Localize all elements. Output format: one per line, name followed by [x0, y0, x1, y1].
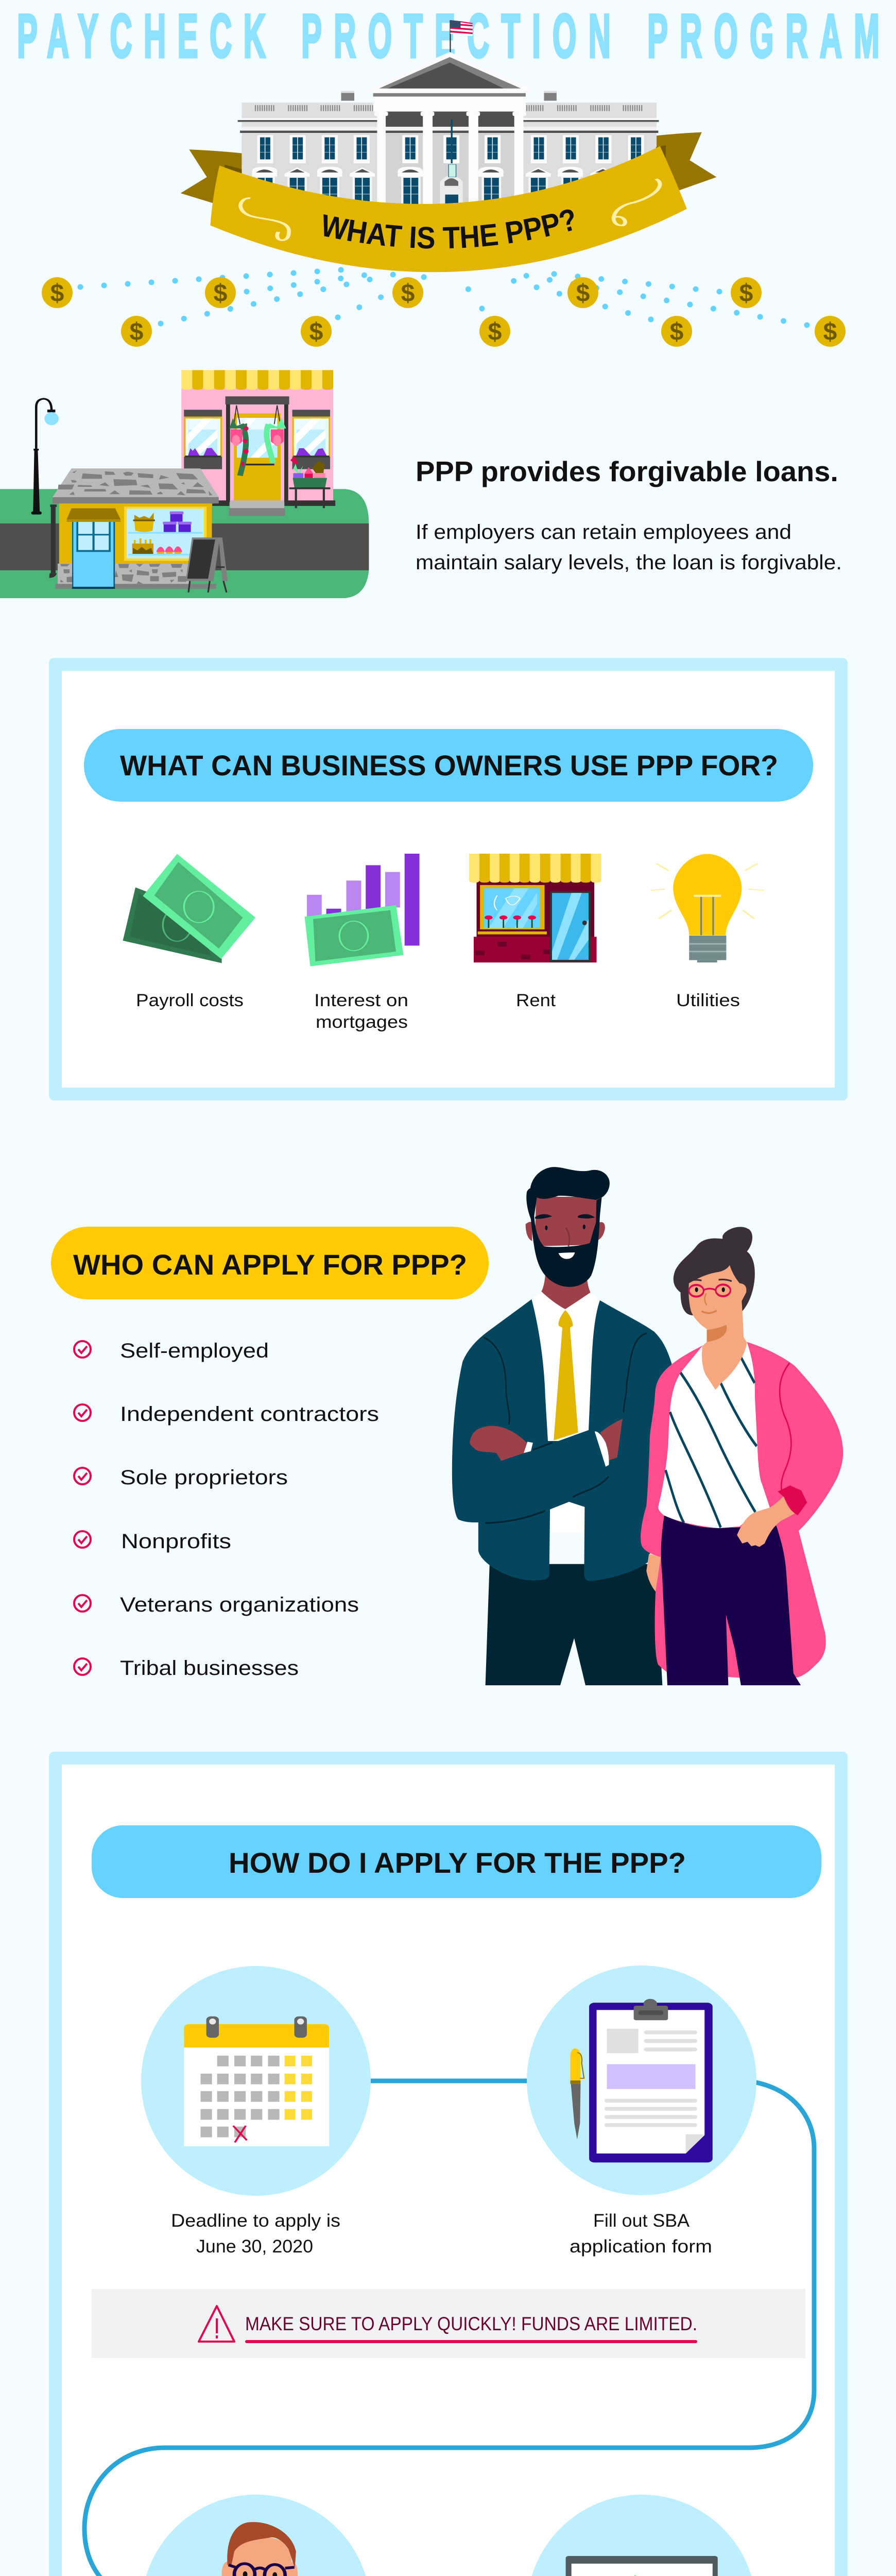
labels: Rent — [516, 991, 556, 1010]
heading pill: WHAT CAN BUSINESS OWNERS USE PPP FOR? — [120, 749, 778, 782]
coins: $ — [214, 280, 228, 307]
intro paragraph: maintain salary levels, the loan is forgivable. — [416, 551, 842, 574]
title: PAYCHECK — [17, 2, 266, 71]
caption — [171, 2211, 340, 2257]
labels: Interest on — [314, 991, 408, 1010]
street lamp — [31, 399, 59, 515]
step 4: payroll data — [527, 2495, 756, 2576]
coins: $ — [50, 280, 64, 307]
caption: Deadline to apply is — [171, 2211, 340, 2231]
title: PROTECTION — [301, 2, 611, 71]
coins: $ — [401, 280, 415, 307]
icon: lightbulb — [650, 854, 764, 962]
icon: bar chart with money — [304, 854, 420, 967]
panel: who can apply — [51, 1167, 843, 1685]
coins: $ — [130, 318, 144, 346]
illustration: business man — [452, 1167, 672, 1685]
icon: laptop with money — [548, 2556, 736, 2576]
coins — [42, 277, 846, 347]
step 2: application form — [527, 1965, 756, 2257]
labels: mortgages — [316, 1012, 408, 1032]
chalkboard sign — [185, 537, 228, 592]
intro heading: PPP provides forgivable loans. — [416, 455, 838, 487]
list text — [120, 1340, 379, 1680]
step 1: deadline — [141, 1966, 371, 2257]
illustration: street with shops — [0, 370, 369, 598]
coins: $ — [309, 318, 323, 346]
labels — [136, 991, 740, 1032]
bakery shop — [49, 468, 219, 589]
caption: June 30, 2020 — [196, 2236, 313, 2257]
list text: Veterans organizations — [120, 1594, 359, 1616]
icon: clipboard and pen — [570, 1999, 713, 2162]
White House building — [238, 20, 659, 207]
list text: Tribal businesses — [120, 1657, 299, 1680]
heading pill — [92, 1825, 821, 1898]
list text: Self-employed — [120, 1340, 269, 1362]
pink flower shop — [181, 370, 335, 516]
icon: warning triangle — [199, 2306, 234, 2342]
coins: $ — [739, 280, 753, 307]
heading pill: WHO CAN APPLY FOR PPP? — [73, 1248, 467, 1281]
list text: Sole proprietors — [120, 1466, 288, 1489]
illustration: man in yellow jacket — [221, 2522, 298, 2576]
panel: how do I apply — [49, 1752, 848, 2576]
step 3: lender — [141, 2495, 371, 2576]
caption: application form — [570, 2236, 712, 2257]
list text: Nonprofits — [121, 1530, 231, 1553]
banner tails — [181, 132, 717, 204]
title — [17, 2, 880, 71]
icon: storefront — [469, 854, 601, 962]
ground and road — [0, 489, 369, 598]
illustration: White House with banner — [180, 20, 717, 272]
intro paragraph — [416, 521, 842, 574]
checklist — [74, 1340, 379, 1680]
banner text — [323, 209, 574, 249]
coins: $ — [488, 318, 502, 346]
heading pill — [51, 1227, 489, 1299]
check icons — [74, 1341, 91, 1675]
panel: what can business owners use PPP for — [49, 658, 848, 1100]
list text: Independent contractors — [120, 1403, 379, 1426]
labels: Payroll costs — [136, 991, 244, 1010]
heading pill — [84, 729, 813, 802]
icon: payroll money — [123, 854, 255, 963]
coins: $ — [823, 318, 837, 346]
warning callout: funds limited: MAKE SURE TO APPLY QUICKLY! FUNDS ARE LIMITED. — [245, 2313, 697, 2334]
icon: calendar — [184, 2016, 329, 2146]
process connector lines — [84, 2081, 814, 2576]
labels: Utilities — [676, 991, 740, 1010]
coins: $ — [670, 318, 684, 346]
banner ribbon — [210, 145, 687, 272]
illustration: business woman — [641, 1227, 843, 1685]
caption: Fill out SBA — [593, 2211, 690, 2231]
intro paragraph: If employers can retain employees and — [416, 521, 791, 544]
money trail dots — [80, 268, 807, 325]
banner text: WHAT IS THE PPP? — [323, 209, 574, 249]
coins: $ — [576, 280, 590, 307]
warning callout: funds limited — [92, 2289, 805, 2358]
title: PROGRAM — [647, 2, 880, 71]
heading pill: HOW DO I APPLY FOR THE PPP? — [229, 1846, 686, 1879]
caption — [570, 2211, 712, 2257]
